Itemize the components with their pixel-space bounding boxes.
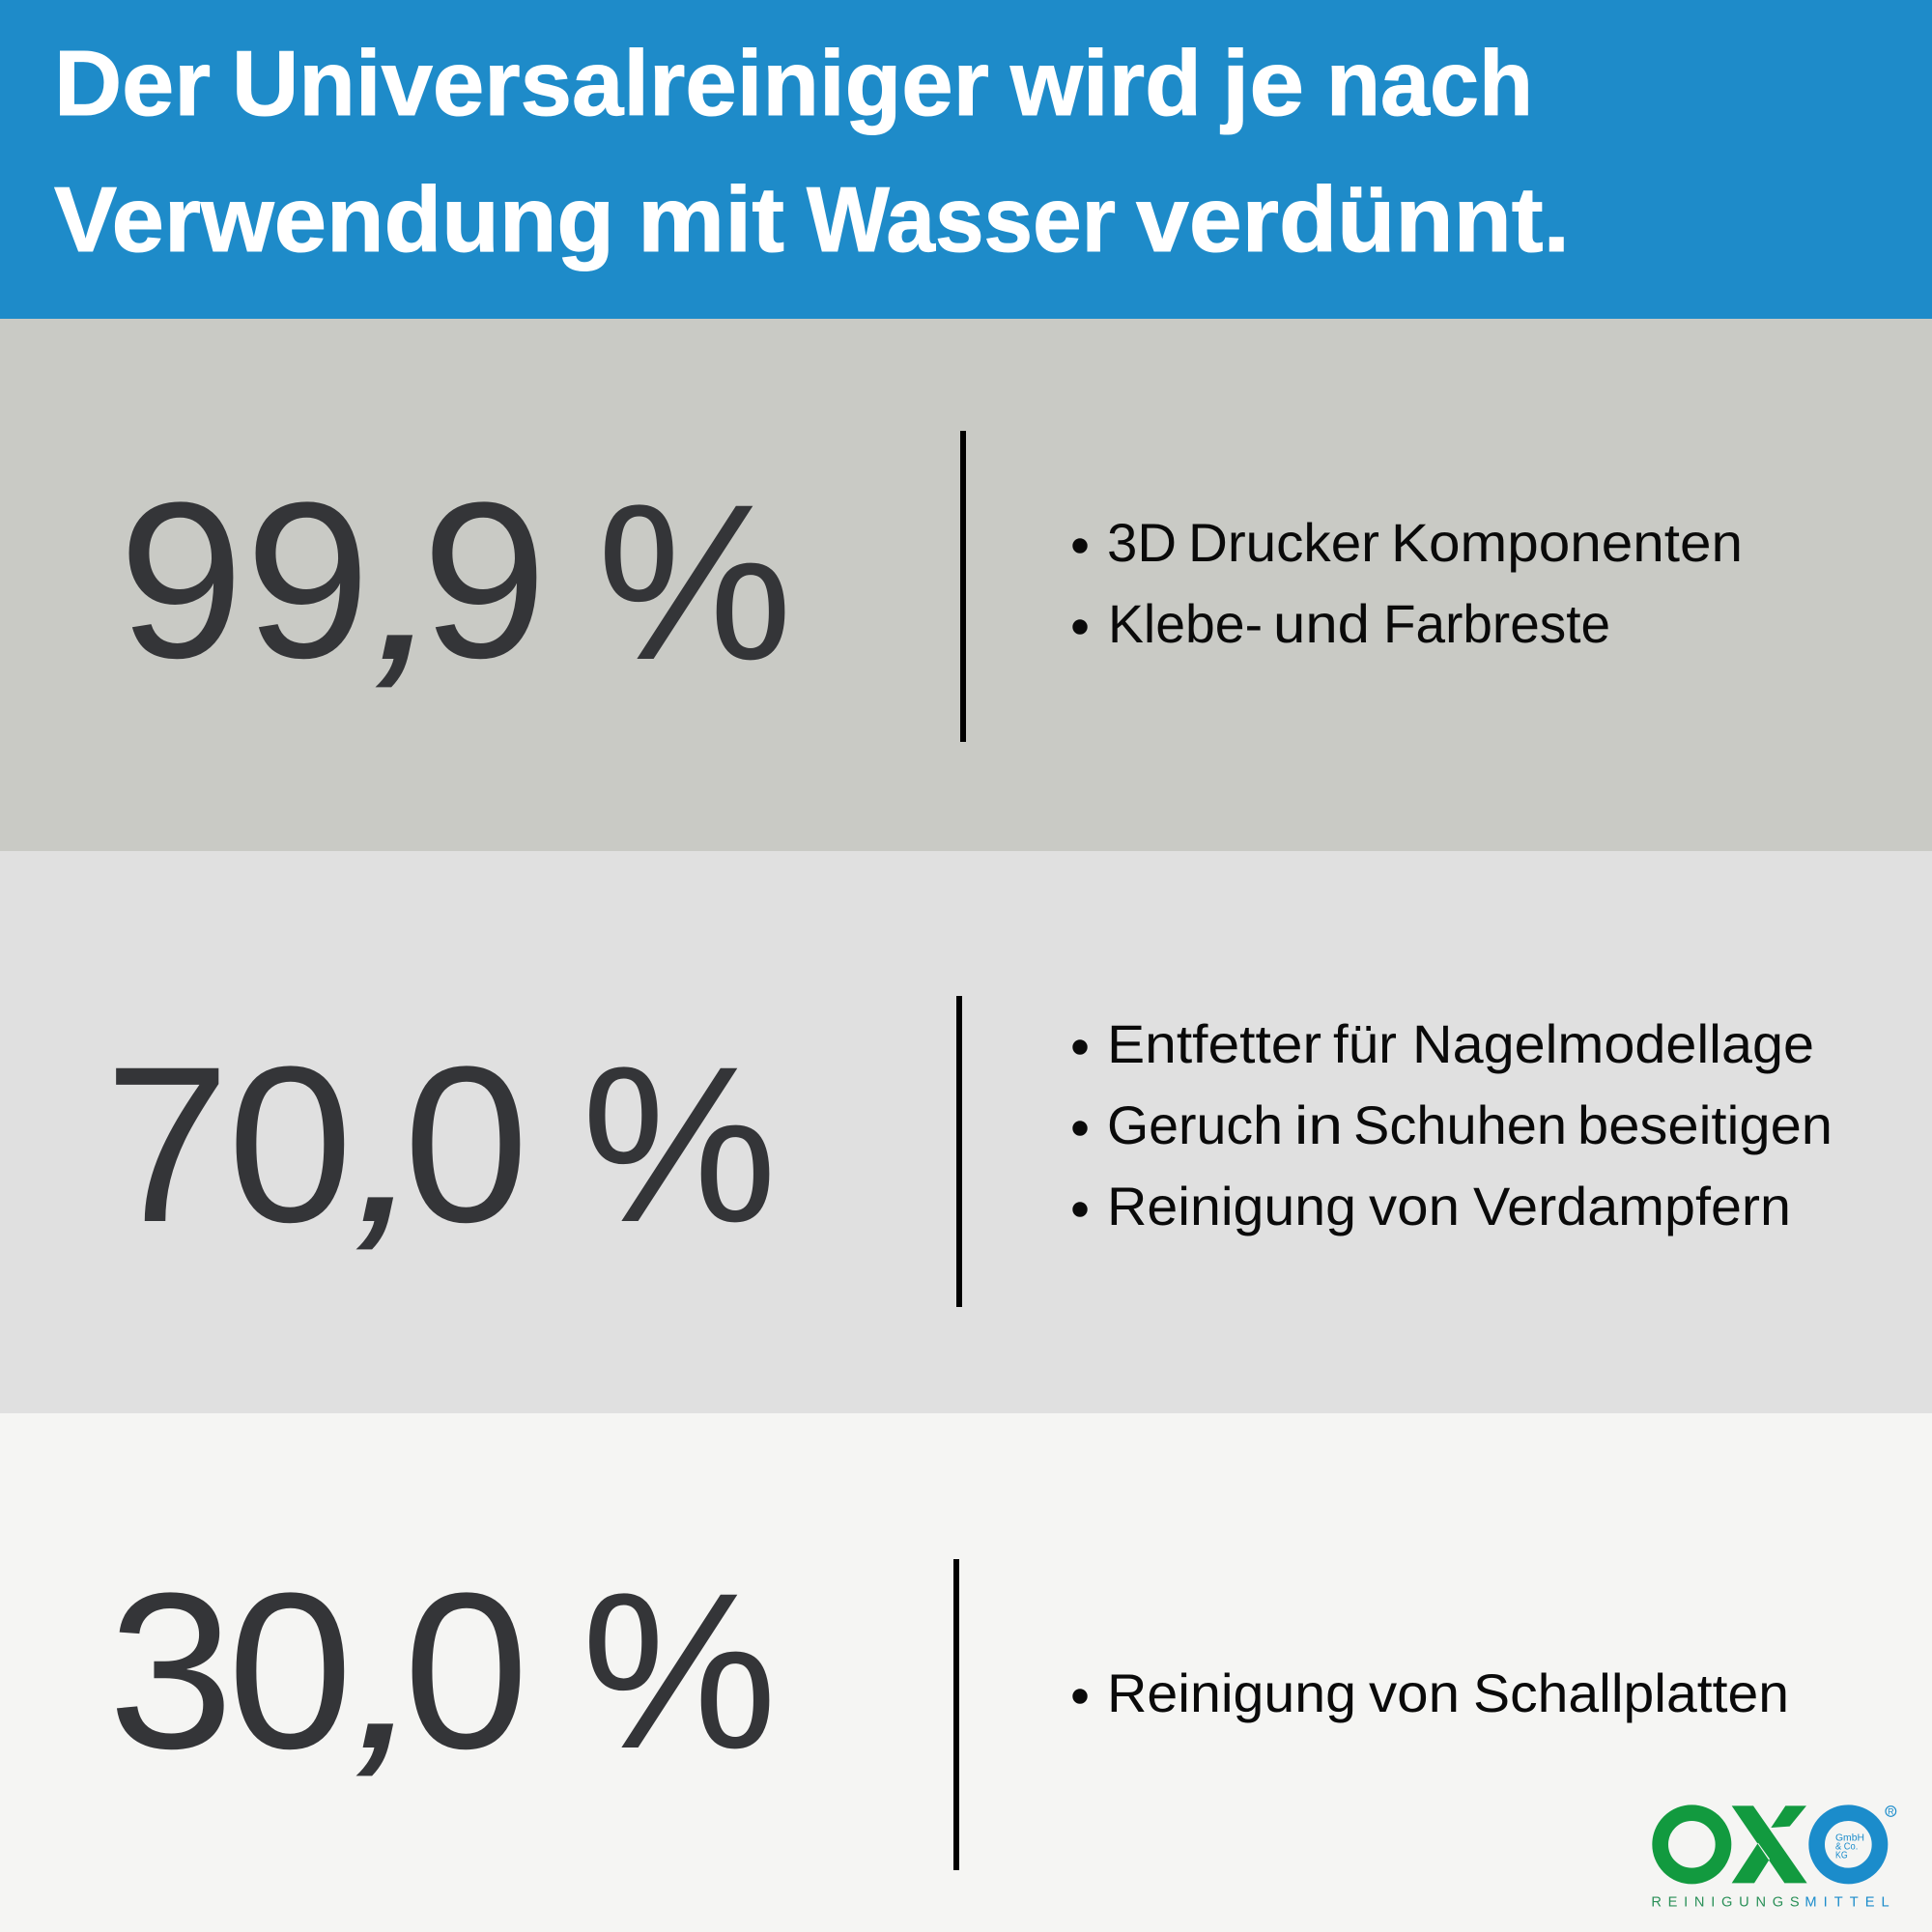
panel: 99,9 % — [0, 319, 1932, 851]
title — [54, 32, 1570, 271]
percentage: 99,9 %: , — [348, 459, 474, 706]
bullet list: Schuhen — [1353, 1094, 1567, 1155]
logo wordmark: MITTEL — [1804, 1894, 1889, 1910]
title: verdünnt. — [1136, 168, 1570, 271]
title: Universalreiniger — [232, 32, 989, 135]
percentage: 99,9 %: % — [597, 459, 792, 706]
bullet list: in — [1294, 1094, 1343, 1155]
panel: 30,0 % — [0, 1413, 1932, 1932]
logo wordmark: REINIGUNGS — [1651, 1894, 1800, 1910]
bullet list: Komponenten — [1391, 512, 1743, 573]
percentage: 30,0 %: % — [582, 1548, 777, 1795]
bullet list: Entfetter — [1107, 1013, 1321, 1074]
percentage: 30,0 %: , — [328, 1548, 455, 1795]
title: Verwendung — [54, 168, 614, 271]
divider — [960, 431, 966, 742]
title: wird — [1009, 32, 1202, 135]
logo wordmark — [1651, 1894, 1889, 1910]
bullet list: Schallplatten — [1473, 1662, 1789, 1723]
panel: 70,0 % — [0, 851, 1932, 1413]
bullet list: Klebe- — [1108, 593, 1263, 654]
percentage: 30,0 %: 30, 0 — [0, 1548, 528, 1796]
bullet list — [1072, 1662, 1789, 1723]
bullet list: Reinigung — [1107, 1662, 1356, 1723]
bullet list: Drucker — [1188, 512, 1379, 573]
bullet list: für — [1333, 1013, 1397, 1074]
bullet list: von — [1369, 1662, 1460, 1723]
divider — [956, 996, 962, 1307]
percentage: 70,0 %: , — [328, 1021, 455, 1268]
title: Wasser — [807, 168, 1116, 271]
logo company form — [1835, 1833, 1864, 1861]
logo company form: & Co. — [1835, 1842, 1858, 1853]
percentage: 70,0 % — [0, 1021, 777, 1269]
percentage: 99,9 %: 99, 9 — [0, 457, 547, 705]
title: mit — [638, 168, 784, 271]
logo blue O — [1817, 1813, 1880, 1876]
logo green X — [1732, 1805, 1807, 1883]
bullet list: 3D — [1107, 512, 1177, 573]
bullet list: Verdampfern — [1473, 1176, 1791, 1236]
title: Der — [54, 32, 211, 135]
percentage: 30,0 % — [0, 1548, 777, 1796]
bullet list: Nagelmodellage — [1412, 1013, 1814, 1074]
bullet list: Geruch — [1107, 1094, 1283, 1155]
logo: OXO Reinigungsmittel — [1651, 1805, 1896, 1910]
bullet list: von — [1369, 1176, 1460, 1236]
bullet list — [1072, 1013, 1833, 1236]
title: je — [1220, 32, 1304, 135]
percentage: 70,0 %: 70, 0 — [0, 1021, 528, 1269]
bullet list: beseitigen — [1577, 1094, 1833, 1155]
percentage: 70,0 %: % — [582, 1021, 777, 1268]
logo registered mark: R — [1888, 1806, 1894, 1816]
percentage: 99,9 % — [0, 457, 792, 706]
bullet list: Farbreste — [1383, 593, 1610, 654]
logo green O — [1661, 1813, 1723, 1876]
logo company form: KG — [1835, 1850, 1848, 1861]
header band — [0, 0, 1932, 319]
bullet list: Reinigung — [1107, 1176, 1356, 1236]
title: nach — [1326, 32, 1533, 135]
divider — [953, 1559, 959, 1870]
logo registered mark — [1886, 1806, 1896, 1816]
logo company form: GmbH — [1835, 1833, 1864, 1844]
bullet list: und — [1273, 593, 1370, 654]
bullet list — [1072, 512, 1743, 654]
